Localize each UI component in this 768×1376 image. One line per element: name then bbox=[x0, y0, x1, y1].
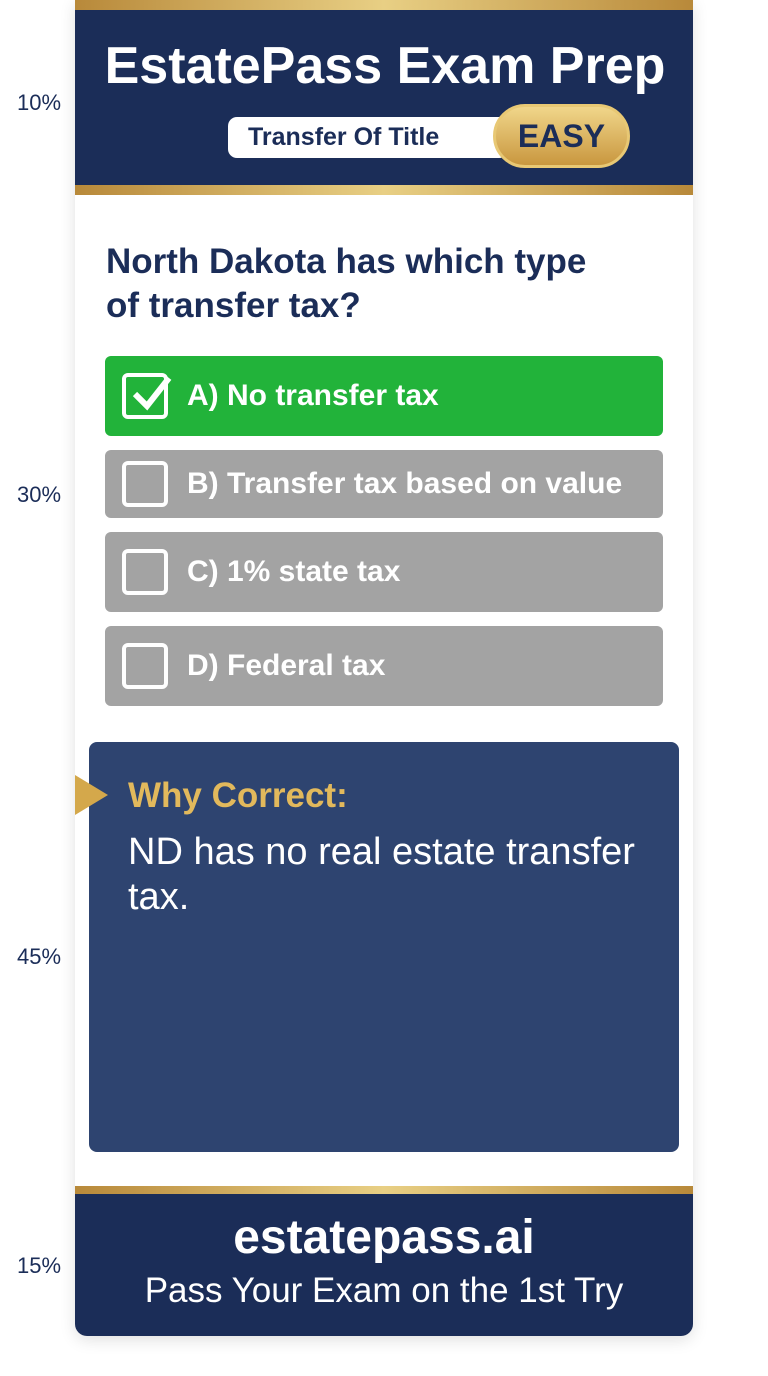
option C: C) 1% state tax bbox=[187, 555, 400, 588]
footer url: estatepass.ai bbox=[233, 1211, 535, 1264]
footer bbox=[75, 1186, 693, 1336]
label: 45%: 45% bbox=[17, 944, 61, 969]
option A correct: A) No transfer tax bbox=[187, 379, 439, 412]
label: 15%: 15% bbox=[17, 1253, 61, 1278]
option D: D) Federal tax bbox=[187, 649, 385, 682]
option A correct bbox=[105, 356, 663, 436]
tagline: Pass Your Exam on the 1st Try bbox=[145, 1271, 623, 1310]
question: North Dakota has which type of transfer tax? bbox=[106, 242, 586, 325]
topic pill bbox=[228, 117, 508, 158]
label: 30%: 30% bbox=[17, 482, 61, 507]
option B: B) Transfer tax based on value bbox=[187, 467, 622, 500]
title: EstatePass Exam Prep bbox=[105, 37, 665, 95]
difficulty badge: EASY bbox=[518, 118, 605, 154]
header bbox=[75, 0, 693, 195]
option B bbox=[105, 450, 663, 518]
difficulty badge bbox=[493, 104, 630, 168]
topic pill: Transfer Of Title bbox=[248, 123, 439, 151]
explanation panel bbox=[89, 742, 679, 1152]
arrow marker bbox=[75, 775, 108, 815]
label: 10%: 10% bbox=[17, 90, 61, 115]
option D bbox=[105, 626, 663, 706]
card bbox=[75, 0, 693, 1336]
option C bbox=[105, 532, 663, 612]
explanation text: ND has no real estate transfer tax. bbox=[128, 831, 635, 918]
heading: Why Correct: bbox=[128, 776, 348, 815]
